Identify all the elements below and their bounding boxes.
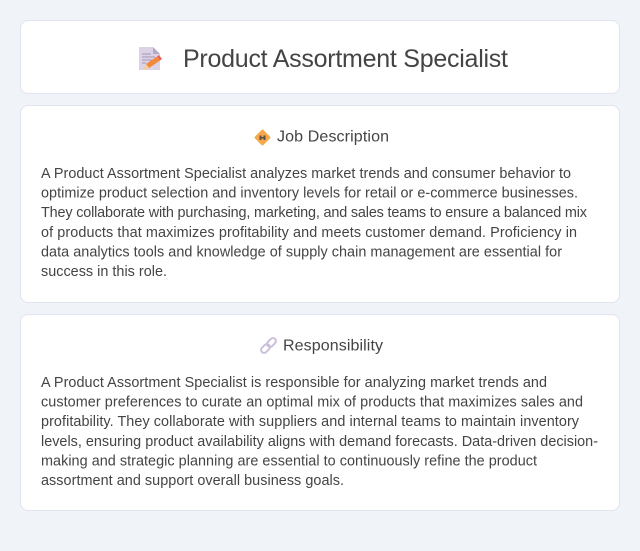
heading: responsibility: Responsibility [283, 338, 383, 354]
panel: responsibility [20, 314, 620, 511]
text block: job description: They collaborate with purchasing, marketing, and sales teams to ensure a balanced mix [41, 205, 588, 221]
heading: job description: Job Description [277, 128, 389, 146]
text block: job description: success in this role. [41, 264, 167, 280]
panel: title card [20, 20, 620, 94]
text block: responsibility: customer preferences to curate an optimal mix of products that maximizes sales and [41, 395, 583, 411]
text block: responsibility: levels, ensuring product availability aligns with demand forecasts. Data-driven decision- [41, 434, 598, 450]
text block: job description: A Product Assortment Specialist analyzes market trends and consumer behavior to [41, 166, 571, 182]
text block: job description: of products that maximizes profitability and meets customer demand. Proficiency in [41, 225, 577, 241]
icon: diamond sign [254, 130, 270, 146]
text block: responsibility: making and strategic planning are essential to continuously refine the product [41, 453, 537, 469]
icon: chain link [260, 337, 277, 354]
text block: responsibility [41, 375, 598, 489]
text block: job description: data analytics tools and knowledge of supply chain management are essential for [41, 244, 562, 260]
text block: responsibility: A Product Assortment Specialist is responsible for analyzing market trends and [41, 375, 547, 391]
text block: job description: optimize product selection and inventory levels for retail or e-commerce businesses. [41, 186, 578, 202]
text block: responsibility: assortment and support overall business goals. [41, 473, 344, 489]
icon: document with pencil [139, 47, 162, 70]
title: Product Assortment Specialist [183, 45, 508, 73]
panel: job description [20, 105, 620, 303]
text block: responsibility: profitability. They collaborate with suppliers and internal teams to maintain inventory [41, 414, 580, 430]
text block: job description [41, 166, 588, 280]
